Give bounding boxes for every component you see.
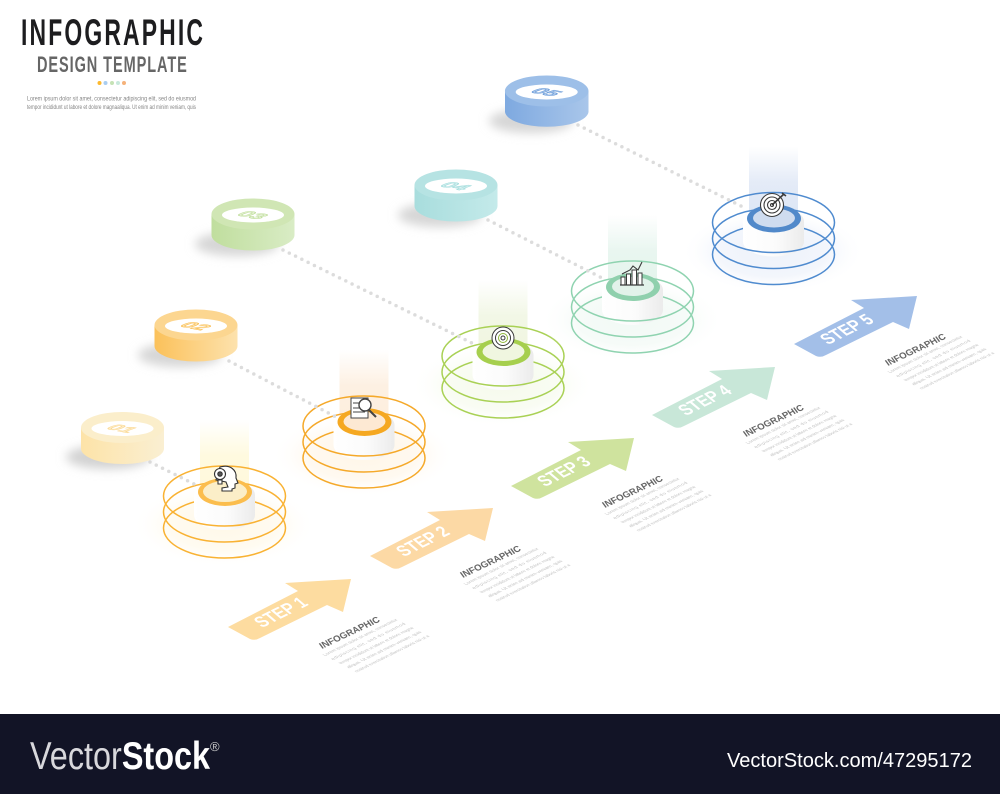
text block: step 1	[317, 615, 432, 673]
text block: step 2: nostrud exercitation ullamco laboris nisi ut a	[494, 563, 573, 602]
arrow: step 1	[228, 579, 351, 640]
footer logo: VectorStock	[30, 735, 210, 778]
text block: step 3: INFOGRAPHIC	[600, 474, 666, 510]
text block: step 5: Lorem ipsum dolor sit amet, consectetur	[887, 335, 965, 374]
text block: step 3: aliqua. Ut enim ad minim veniam, quis	[627, 489, 706, 528]
disc 01: 01	[100, 423, 143, 435]
text block: step 4: aliqua. Ut enim ad minim veniam, quis	[768, 418, 847, 457]
text block: step 2: Lorem ipsum dolor sit amet, consectetur	[463, 547, 541, 586]
text block: step 2: adipiscing elit, sed do eiusmod	[470, 551, 549, 590]
icon: bar chart with trend line	[620, 262, 644, 285]
footer url: VectorStock.com/47295172	[727, 750, 972, 772]
icon: document with magnifier	[351, 398, 376, 418]
text block: step 3	[600, 474, 714, 532]
text block: step 2	[458, 544, 573, 602]
text block: step 1: Lorem ipsum dolor sit amet, consectetur	[322, 618, 400, 657]
text block: step 3: adipiscing elit, sed do eiusmod	[611, 481, 690, 520]
icon: head with gear bulb	[214, 466, 238, 491]
colour dots	[98, 81, 126, 85]
intro text	[27, 96, 197, 111]
text block: step 3: nostrud exercitation ullamco laboris nisi ut a	[635, 493, 714, 532]
title: INFOGRAPHIC	[21, 11, 203, 53]
text block: step 4	[741, 403, 855, 461]
disc 03: 03	[231, 210, 273, 221]
disc 05: 05	[524, 87, 567, 98]
arrow: step 4	[652, 367, 775, 428]
disc 03	[195, 198, 294, 256]
registered mark: ®	[210, 739, 220, 754]
text block: step 5: tempor incididunt ut labore et dolore magna	[902, 343, 981, 382]
unit 3 platform with rings	[283, 250, 594, 427]
icon: target gear	[492, 327, 514, 349]
text block: step 4: nostrud exercitation ullamco laboris nisi ut a	[776, 422, 855, 461]
text block: step 5	[883, 332, 997, 390]
footer band	[0, 714, 1000, 794]
intro text: Lorem ipsum dolor sit amet, consectetur adipiscing elit, sed do eiusmod	[27, 96, 196, 102]
arrow: step 5	[794, 296, 917, 357]
text block: step 4: Lorem ipsum dolor sit amet, consectetur	[745, 406, 823, 445]
arrow: step 2	[370, 508, 493, 569]
arrow: step 2: STEP 2	[391, 522, 454, 560]
text block: step 1: INFOGRAPHIC	[317, 615, 383, 651]
unit 1 platform with rings	[132, 420, 316, 567]
text block: step 4: INFOGRAPHIC	[741, 403, 807, 439]
arrow: step 3	[511, 438, 634, 499]
disc 04	[398, 170, 498, 227]
text block: step 5: INFOGRAPHIC	[883, 332, 949, 368]
icon: target with dart	[760, 193, 786, 216]
text block: step 3: Lorem ipsum dolor sit amet, consectetur	[604, 477, 682, 516]
disc 02: 02	[174, 321, 216, 332]
text block: step 5: adipiscing elit, sed do eiusmod	[894, 339, 973, 378]
text block: step 4: adipiscing elit, sed do eiusmod	[752, 410, 831, 449]
subtitle: DESIGN TEMPLATE	[37, 52, 187, 77]
text block: step 1: nostrud exercitation ullamco laboris nisi ut a	[353, 634, 432, 673]
arrow: step 4: STEP 4	[673, 381, 737, 419]
disc 04: 04	[434, 181, 476, 192]
arrow: step 5: STEP 5	[815, 310, 878, 348]
text block: step 2: aliqua. Ut enim ad minim veniam, quis	[486, 559, 565, 598]
text block: step 1: tempor incididunt ut labore et dolore magna	[337, 626, 416, 665]
text block: step 5: aliqua. Ut enim ad minim veniam, quis	[910, 347, 989, 386]
text block: step 1: aliqua. Ut enim ad minim veniam, quis	[345, 630, 424, 669]
disc 01	[66, 412, 164, 469]
text block: step 1: adipiscing elit, sed do eiusmod	[329, 622, 408, 661]
header: title block	[21, 11, 203, 111]
intro text: tempor incididunt ut labore et dolore magnaaliqua. Ut enim ad minim veniam, quis	[27, 104, 197, 111]
unit 4 platform with rings	[488, 215, 724, 362]
disc 05	[489, 76, 588, 133]
unit 2 platform with rings	[229, 350, 456, 497]
text block: step 4: tempor incididunt ut labore et dolore magna	[760, 414, 839, 453]
arrow: step 1: STEP 1	[249, 593, 312, 631]
unit 5 platform with rings	[578, 125, 865, 294]
text block: step 2: tempor incididunt ut labore et dolore magna	[478, 555, 557, 594]
text block: step 2: INFOGRAPHIC	[458, 544, 524, 580]
text block: step 3: tempor incididunt ut labore et dolore magna	[619, 485, 698, 524]
disc 02	[138, 310, 238, 367]
arrow: step 3: STEP 3	[532, 452, 595, 490]
